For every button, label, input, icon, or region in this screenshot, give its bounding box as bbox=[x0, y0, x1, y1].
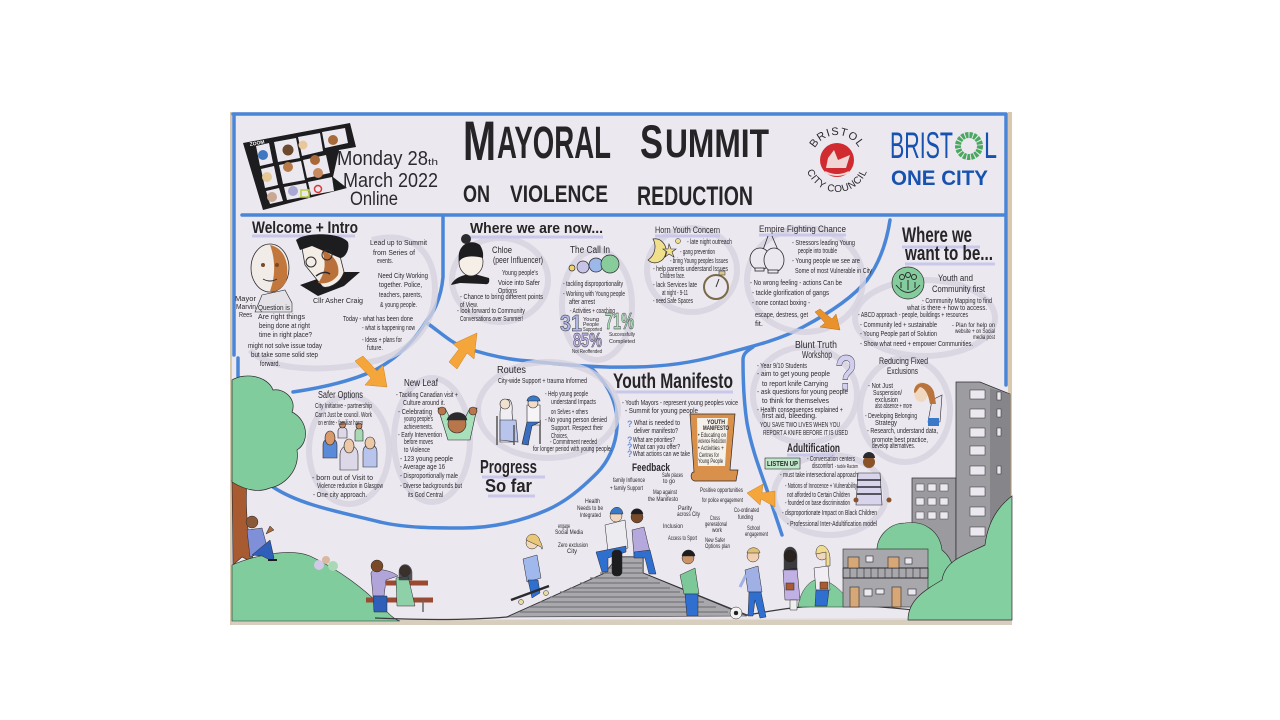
block: Routes: for longer period with young people. bbox=[533, 446, 612, 453]
stat: 31: 31 bbox=[560, 310, 582, 336]
block: Reducing Fixed Exclusions: exclusion bbox=[875, 397, 898, 404]
block: The Call In: Supported bbox=[583, 327, 602, 333]
text: speaker notes: Question is bbox=[258, 305, 290, 312]
panel: progress so far bbox=[309, 362, 618, 504]
panel: where we want to be: media post bbox=[973, 335, 995, 341]
figure: boy reading under tree bbox=[246, 516, 277, 561]
block: Empire Fighting Chance: escape, destress, get bbox=[755, 312, 808, 319]
feedback cloud: Access to Sport bbox=[668, 536, 697, 542]
title: ON bbox=[463, 181, 490, 208]
panel: where we want to be: - Show what need + empower Communities. bbox=[860, 341, 973, 348]
panel: where we want to be: - Community Mapping to find bbox=[922, 298, 992, 305]
scroll: youth manifesto: violence Reduction bbox=[698, 439, 726, 445]
date bbox=[337, 148, 438, 210]
illustration: small bush bbox=[798, 579, 850, 607]
block: The Call In: - tackling disproportionality bbox=[563, 281, 623, 288]
panel: welcome and intro bbox=[235, 218, 435, 368]
illustration: bush behind flats bbox=[877, 523, 954, 600]
panel: Blunt Truth workshop bbox=[753, 340, 857, 443]
block: Reducing Fixed Exclusions: - Developing Belonging bbox=[865, 413, 917, 420]
block: Safer Options: Can't Just be council. Work bbox=[315, 412, 372, 419]
block: Routes: Support. Respect their bbox=[551, 425, 603, 432]
figure: young person wrapped in labels bbox=[854, 452, 892, 505]
feedback cloud: Inclusion bbox=[663, 524, 683, 530]
panel: Blunt Truth workshop: to think for themselves bbox=[762, 398, 829, 405]
block: Horn Youth Concern: - bring Young peoples Issues bbox=[670, 258, 728, 265]
panel: Blunt Truth workshop: to report knife Carrying bbox=[762, 381, 828, 388]
block: Safer Options: Safer Options bbox=[318, 390, 363, 401]
title: REDUCTION bbox=[637, 181, 753, 211]
panel: Youth Manifesto bbox=[555, 370, 768, 555]
text: Chloe notes: Young people's bbox=[502, 270, 538, 277]
text: speaker notes: might not solve issue today bbox=[248, 343, 322, 350]
feedback cloud: Map against bbox=[653, 490, 677, 496]
panel: where we want to be: what is there + how to access. bbox=[906, 305, 987, 312]
illustration: green hill bbox=[232, 553, 400, 621]
arrow: progress to where we are now bbox=[449, 333, 477, 369]
block: Reducing Fixed Exclusions: promote best practice, bbox=[872, 437, 928, 444]
block: New Leaf: before moves bbox=[404, 439, 433, 446]
panel: Youth Manifesto: What actions can we take bbox=[633, 451, 690, 458]
panel: where we want to be: Community first bbox=[932, 284, 985, 294]
block: New Leaf: to Violence bbox=[404, 447, 430, 454]
text: speaker notes: Marvin bbox=[236, 304, 256, 311]
feedback cloud: + family Support bbox=[610, 486, 643, 492]
feedback cloud: Integrated bbox=[580, 513, 601, 519]
logo: Bristol One City: BRIST bbox=[890, 125, 953, 166]
panel: where we are now: Where we are now... bbox=[470, 220, 603, 237]
panel: Adultification: - disproportionate Impact on Black Children bbox=[782, 510, 877, 517]
text: speaker notes: together. Police, bbox=[379, 282, 422, 289]
icon: zoom tablet: ZOOM bbox=[249, 139, 265, 148]
block: Routes: - Help young people bbox=[545, 391, 588, 398]
panel: where we want to be: Youth and bbox=[938, 273, 973, 283]
panel: Blunt Truth workshop: first aid, bleeding. bbox=[762, 413, 817, 420]
panel: Blunt Truth workshop: REPORT A KNIFE BEFORE IT IS USED bbox=[763, 430, 848, 437]
figure: skateboarder bbox=[511, 534, 549, 604]
block: Routes: Routes bbox=[497, 365, 526, 376]
feedback cloud: generational bbox=[705, 522, 727, 528]
portrait: Mayor Marvin Rees bbox=[251, 244, 292, 312]
portrait: Cllr Asher Craig bbox=[296, 234, 360, 296]
date: th bbox=[428, 157, 438, 167]
illustration: ground line and steps bbox=[375, 557, 930, 619]
block: The Call In: The Call In bbox=[570, 245, 610, 256]
arrow: welcome to progress bbox=[355, 356, 387, 387]
text: speaker notes: Today - what has been done bbox=[343, 316, 413, 323]
panel: Adultification: not afforded to Certain Children bbox=[787, 492, 850, 499]
figure: couple on bench bbox=[366, 560, 433, 612]
stat: 85%: 85% bbox=[573, 330, 602, 352]
block: Safer Options: - One city approach. bbox=[313, 492, 367, 499]
figures: two women walking bbox=[783, 545, 830, 610]
block: Empire Fighting Chance: Empire Fighting Chance bbox=[759, 224, 846, 234]
feedback cloud: to go bbox=[663, 479, 676, 485]
block: New Leaf bbox=[396, 378, 477, 499]
block: New Leaf: New Leaf bbox=[404, 378, 438, 389]
title: M bbox=[463, 109, 496, 172]
block: The Call In: Not Reoffended bbox=[572, 349, 602, 355]
illustration: low-rise flats bbox=[843, 549, 928, 607]
illustration: tree bbox=[232, 376, 306, 565]
block: Reducing Fixed Exclusions: Exclusions bbox=[887, 366, 918, 376]
heading: progress so far: Progress bbox=[480, 457, 537, 477]
block: Horn Youth Concern: - lack Services late bbox=[653, 282, 697, 289]
block: Horn Youth Concern: - late night outreach bbox=[687, 239, 732, 246]
text: speaker notes: time in right place? bbox=[259, 332, 312, 339]
text: Chloe notes: Conversations over Summer! bbox=[460, 316, 523, 323]
block: The Call In: Completed bbox=[609, 339, 635, 345]
feedback cloud: Health bbox=[585, 499, 600, 505]
feedback cloud: Feedback bbox=[632, 462, 671, 474]
text: speaker notes: Cllr Asher Craig bbox=[313, 298, 363, 305]
panel: Youth Manifesto: What is needed to bbox=[634, 420, 680, 427]
feedback cloud: across City bbox=[677, 512, 700, 518]
block: Reducing Fixed Exclusions: develop alternatives. bbox=[872, 443, 915, 450]
block: Reducing Fixed Exclusions: Reducing Fixed bbox=[879, 356, 928, 366]
panel: Adultification: - founded on base discrimination bbox=[785, 500, 850, 507]
block: Safer Options bbox=[312, 390, 384, 499]
title: AYORAL bbox=[497, 117, 611, 168]
heading: progress so far bbox=[480, 457, 545, 496]
figures: two teens sitting on steps bbox=[596, 507, 656, 576]
scroll: youth manifesto: MANIFESTO bbox=[703, 426, 729, 432]
text: Chloe notes: - look forward to Community bbox=[457, 308, 525, 315]
panel: Adultification: - Conversation centers bbox=[807, 456, 855, 463]
figures: partnership group bbox=[323, 422, 377, 470]
block: Empire Fighting Chance: - No wrong feeling - actions Can be bbox=[750, 280, 842, 287]
scroll: youth manifesto bbox=[690, 414, 738, 481]
title: S bbox=[640, 115, 663, 168]
panel: Youth Manifesto: What are priorities? bbox=[633, 437, 675, 444]
illustration: large foreground bush bbox=[908, 496, 1012, 620]
text: speaker notes: Lead up to Summit bbox=[370, 240, 427, 247]
feedback cloud: New Safer bbox=[705, 538, 725, 544]
panel: Blunt Truth workshop: Workshop bbox=[802, 350, 832, 361]
block: Reducing Fixed Exclusions: - Not Just bbox=[868, 383, 893, 390]
icon: community circle bbox=[892, 267, 924, 299]
icon: question mark: ? bbox=[835, 345, 857, 401]
block: Empire Fighting Chance: - Stressors leading Young bbox=[792, 240, 855, 247]
block: New Leaf: achievements. bbox=[404, 424, 433, 431]
block: Horn Youth Concern: Horn Youth Concern bbox=[655, 225, 720, 235]
figure: student with head bowed bbox=[914, 382, 942, 426]
date: March 2022 bbox=[343, 170, 438, 192]
text: speaker notes: Need City Working bbox=[378, 273, 428, 280]
block: Empire Fighting Chance bbox=[750, 224, 872, 328]
block: Reducing Fixed Exclusions bbox=[860, 356, 950, 462]
feedback cloud: family Influence bbox=[613, 478, 646, 484]
logo: Bristol City Council: BRISTOL bbox=[809, 127, 862, 148]
panel: Youth Manifesto: What can you offer? bbox=[633, 444, 680, 451]
text: Chloe notes: of View. bbox=[460, 302, 478, 309]
block: The Call In: - Working with Young people bbox=[563, 291, 625, 298]
block: Routes: City-wide Support + trauma Informed bbox=[498, 378, 587, 385]
panel: Adultification bbox=[765, 441, 892, 535]
block: Empire Fighting Chance: people into trouble bbox=[798, 248, 837, 255]
feedback cloud: Options plan bbox=[705, 544, 730, 550]
feedback cloud: the Manifesto bbox=[648, 497, 679, 503]
panel: where we want to be: - Young People part of Solution bbox=[860, 331, 937, 338]
block: Reducing Fixed Exclusions: Suspension/ bbox=[873, 390, 902, 397]
panel: Adultification: discomfort bbox=[812, 463, 833, 470]
icon: question markers: ? bbox=[627, 419, 632, 429]
block: Routes: Choices. bbox=[551, 433, 568, 440]
block: Empire Fighting Chance: fit. bbox=[755, 321, 763, 328]
feedback cloud: Safe places bbox=[662, 473, 683, 479]
block: New Leaf: - 123 young people bbox=[400, 456, 453, 463]
feedback cloud: Parity bbox=[678, 506, 692, 512]
panel: Blunt Truth workshop: - Year 9/10 Students bbox=[757, 363, 807, 370]
block: The Call In: People bbox=[583, 322, 599, 328]
text: speaker notes: & young people. bbox=[380, 302, 417, 309]
text: speaker notes: events. bbox=[377, 258, 393, 265]
header bbox=[243, 109, 997, 211]
block: Horn Youth Concern: - need Safe Spaces bbox=[653, 298, 693, 305]
text: speaker notes: - what is happening now bbox=[362, 325, 416, 332]
block: Safer Options: City Initiative - partnership bbox=[315, 403, 372, 410]
text: Chloe notes: Options bbox=[498, 288, 517, 295]
block: Safer Options: - born out of Visit to bbox=[312, 475, 373, 482]
feedback cloud: funding bbox=[738, 515, 753, 521]
poster sheet bbox=[230, 112, 1012, 625]
text: speaker notes: forward. bbox=[260, 361, 280, 368]
text: Chloe notes bbox=[457, 245, 543, 323]
panel: Blunt Truth workshop: - aim to get young people bbox=[757, 371, 830, 378]
logo: Bristol One City: L bbox=[984, 125, 997, 166]
stat: 71%: 71% bbox=[605, 308, 634, 334]
feedback cloud: for police engagement bbox=[702, 498, 743, 504]
text: Chloe notes: Voice into Safer bbox=[498, 280, 541, 287]
arrow: where we are now to blunt truth bbox=[815, 309, 840, 330]
icon: stopwatch bbox=[704, 271, 728, 299]
block: Safer Options: Violence reduction in Glasgow bbox=[317, 483, 384, 490]
block: The Call In: Successfully bbox=[609, 332, 635, 338]
block: Horn Youth Concern: Children face. bbox=[660, 273, 685, 280]
title: UMMIT bbox=[665, 122, 769, 166]
block: Empire Fighting Chance: - Young people we see are bbox=[792, 258, 860, 265]
block: Horn Youth Concern: - gang prevention bbox=[680, 249, 715, 256]
text: speaker notes: Rees bbox=[239, 312, 252, 319]
feedback cloud: City bbox=[567, 549, 577, 555]
panel: Youth Manifesto: - Youth Mayors - represent young peoples voice bbox=[622, 400, 738, 407]
figure: boy and football bbox=[730, 548, 766, 619]
logo: Bristol One City bbox=[890, 125, 997, 190]
block: Reducing Fixed Exclusions: also absence + more bbox=[875, 403, 912, 410]
text: Chloe notes: Chloe bbox=[492, 245, 512, 255]
feedback cloud: engage bbox=[558, 524, 570, 530]
panel: Youth Manifesto: Youth Manifesto bbox=[613, 370, 733, 393]
icon: zoom tablet bbox=[243, 123, 356, 210]
panel: where we want to be: Where we bbox=[902, 224, 972, 247]
arrow: adultification to manifesto bbox=[747, 484, 775, 507]
block: The Call In: after arrest bbox=[569, 299, 595, 306]
panel: Adultification: - tackle Racism bbox=[835, 464, 858, 470]
icons: call in badges bbox=[569, 255, 619, 273]
block: Reducing Fixed Exclusions: Strategy bbox=[875, 420, 897, 427]
feedback cloud: Needs to be bbox=[577, 506, 604, 512]
icon: boxing gloves bbox=[750, 236, 784, 273]
block: Empire Fighting Chance: - none contact boxing - bbox=[752, 300, 811, 307]
icon: question markers: ? bbox=[627, 442, 632, 452]
text: speaker notes: - Ideas + plans for bbox=[362, 337, 402, 344]
block: Routes: - Commitment needed bbox=[550, 439, 597, 446]
text: speaker notes: but take some solid step bbox=[251, 352, 318, 359]
icon: listen up sign: LISTEN UP bbox=[767, 461, 798, 468]
block: New Leaf: - Disproportionally male bbox=[400, 473, 458, 480]
text: speaker notes bbox=[235, 240, 428, 368]
block: Routes: understand Impacts bbox=[551, 399, 596, 406]
panel: Youth Manifesto: - Summit for young people bbox=[625, 408, 698, 415]
block: New Leaf: - Average age 16 bbox=[400, 464, 445, 471]
block: New Leaf: young people's bbox=[404, 416, 433, 423]
title: VIOLENCE bbox=[510, 181, 608, 208]
logo: Bristol City Council: CITY COUNCIL bbox=[808, 170, 867, 192]
text: speaker notes: being done at right bbox=[259, 323, 310, 330]
text: speaker notes: Are right things bbox=[258, 314, 305, 321]
block: The Call In: - Activities + coaching bbox=[570, 308, 615, 315]
text: Chloe notes: - Chance to bring different points bbox=[460, 294, 543, 301]
panel: where we want to be: want to be... bbox=[904, 243, 993, 265]
figures: two seated young people bbox=[497, 396, 540, 445]
panel: where we want to be: - Community led + sustainable bbox=[860, 322, 937, 329]
panel: Adultification: - must take intersectional approach bbox=[780, 472, 858, 479]
icon: question markers: ? bbox=[627, 435, 632, 445]
title bbox=[463, 109, 769, 211]
block: New Leaf: - Diverse backgrounds but bbox=[400, 483, 462, 490]
block: Empire Fighting Chance: - tackle glorification of gangs bbox=[752, 290, 829, 297]
panel: Youth Manifesto: deliver manifesto? bbox=[634, 428, 678, 435]
logo: Bristol One City: ONE CITY bbox=[891, 167, 988, 190]
block: Reducing Fixed Exclusions: - Research, understand data, bbox=[867, 428, 938, 435]
panel: Blunt Truth workshop: - ask questions for young people bbox=[757, 389, 848, 396]
scroll: youth manifesto: YOUTH bbox=[707, 420, 725, 426]
scroll: youth manifesto: • Activities + bbox=[698, 446, 724, 452]
feedback cloud: work bbox=[711, 528, 723, 534]
figure: celebrating young person bbox=[438, 407, 477, 440]
text: Chloe notes: (peer Influencer) bbox=[493, 255, 543, 265]
panel: where we are now bbox=[451, 220, 872, 360]
panel: welcome and intro: Welcome + Intro bbox=[252, 218, 358, 237]
block: Routes bbox=[497, 365, 612, 453]
panel: where we want to be bbox=[855, 224, 995, 462]
feedback cloud: Social Media bbox=[555, 530, 584, 536]
panel: where we want to be: website + on Social bbox=[954, 329, 995, 335]
date: Monday 28 bbox=[337, 148, 428, 170]
panel: where we want to be: - ABCD approach - people, buildings + resources bbox=[858, 312, 968, 319]
block: New Leaf: - Tackling Canadian visit + bbox=[396, 392, 458, 399]
text: speaker notes: Mayor bbox=[235, 296, 257, 303]
block: Horn Youth Concern bbox=[648, 225, 732, 305]
panel: Blunt Truth workshop: Blunt Truth bbox=[795, 340, 837, 351]
block: Empire Fighting Chance: Some of most Vulnerable in City bbox=[795, 268, 872, 275]
illustration: tower blocks bbox=[912, 382, 1010, 564]
icon: moon and stars bbox=[648, 238, 680, 263]
feedback cloud: Zero exclusion bbox=[558, 543, 588, 549]
scroll: youth manifesto: Young People bbox=[698, 459, 723, 465]
text: speaker notes: teachers, parents, bbox=[379, 292, 422, 299]
feedback cloud: School bbox=[747, 526, 760, 532]
block: Routes: on Selves + others bbox=[551, 409, 588, 416]
date: Online bbox=[350, 189, 398, 210]
logo: Bristol City Council bbox=[808, 127, 867, 192]
panel: Adultification: - Notions of Innocence + Vulnerability bbox=[785, 483, 857, 490]
panel: Blunt Truth workshop: YOU SAVE TWO LIVES WHEN YOU bbox=[760, 422, 840, 429]
block: Safer Options: on entire - familiar harm bbox=[318, 420, 363, 427]
feedback cloud: Co-ordinated bbox=[734, 508, 759, 514]
feedback cloud: engagement bbox=[745, 532, 768, 538]
figure: young person in green hoodie bbox=[680, 550, 699, 616]
block: New Leaf: Culture around it. bbox=[403, 400, 445, 407]
scroll: youth manifesto: • Educating on bbox=[698, 433, 726, 439]
feedback cloud: Cross bbox=[710, 516, 720, 522]
text: speaker notes: from Series of bbox=[373, 250, 415, 257]
panel: Blunt Truth workshop: - Health consequences explained + bbox=[757, 407, 843, 414]
block: New Leaf: its God Central bbox=[408, 492, 443, 499]
block: New Leaf: - Celebrating bbox=[398, 409, 432, 416]
icon: question markers bbox=[627, 419, 632, 459]
scroll: youth manifesto: Centres for bbox=[699, 453, 719, 459]
frame and section dividers bbox=[233, 114, 1006, 535]
panel: where we want to be: - Plan for help on bbox=[952, 323, 995, 329]
block: Horn Youth Concern: at night - 9-11 bbox=[662, 290, 688, 297]
panel: Adultification: Adultification bbox=[787, 441, 840, 455]
block: The Call In: Young bbox=[583, 317, 599, 323]
block: Routes: - No young person denied bbox=[545, 417, 607, 424]
feedback cloud: Positive opportunities bbox=[700, 488, 743, 494]
feedback cloud bbox=[555, 462, 768, 555]
panel: Adultification: - Professional Inter-Adultification model bbox=[787, 521, 877, 528]
portrait: Chloe bbox=[451, 234, 489, 285]
block: New Leaf: - Early Intervention bbox=[398, 432, 442, 439]
block: Horn Youth Concern: - help parents understand Issues bbox=[653, 266, 728, 273]
text: speaker notes: future. bbox=[367, 345, 383, 352]
block: The Call In bbox=[560, 245, 635, 355]
heading: progress so far: So far bbox=[485, 476, 532, 496]
icon: question markers: ? bbox=[627, 449, 632, 459]
